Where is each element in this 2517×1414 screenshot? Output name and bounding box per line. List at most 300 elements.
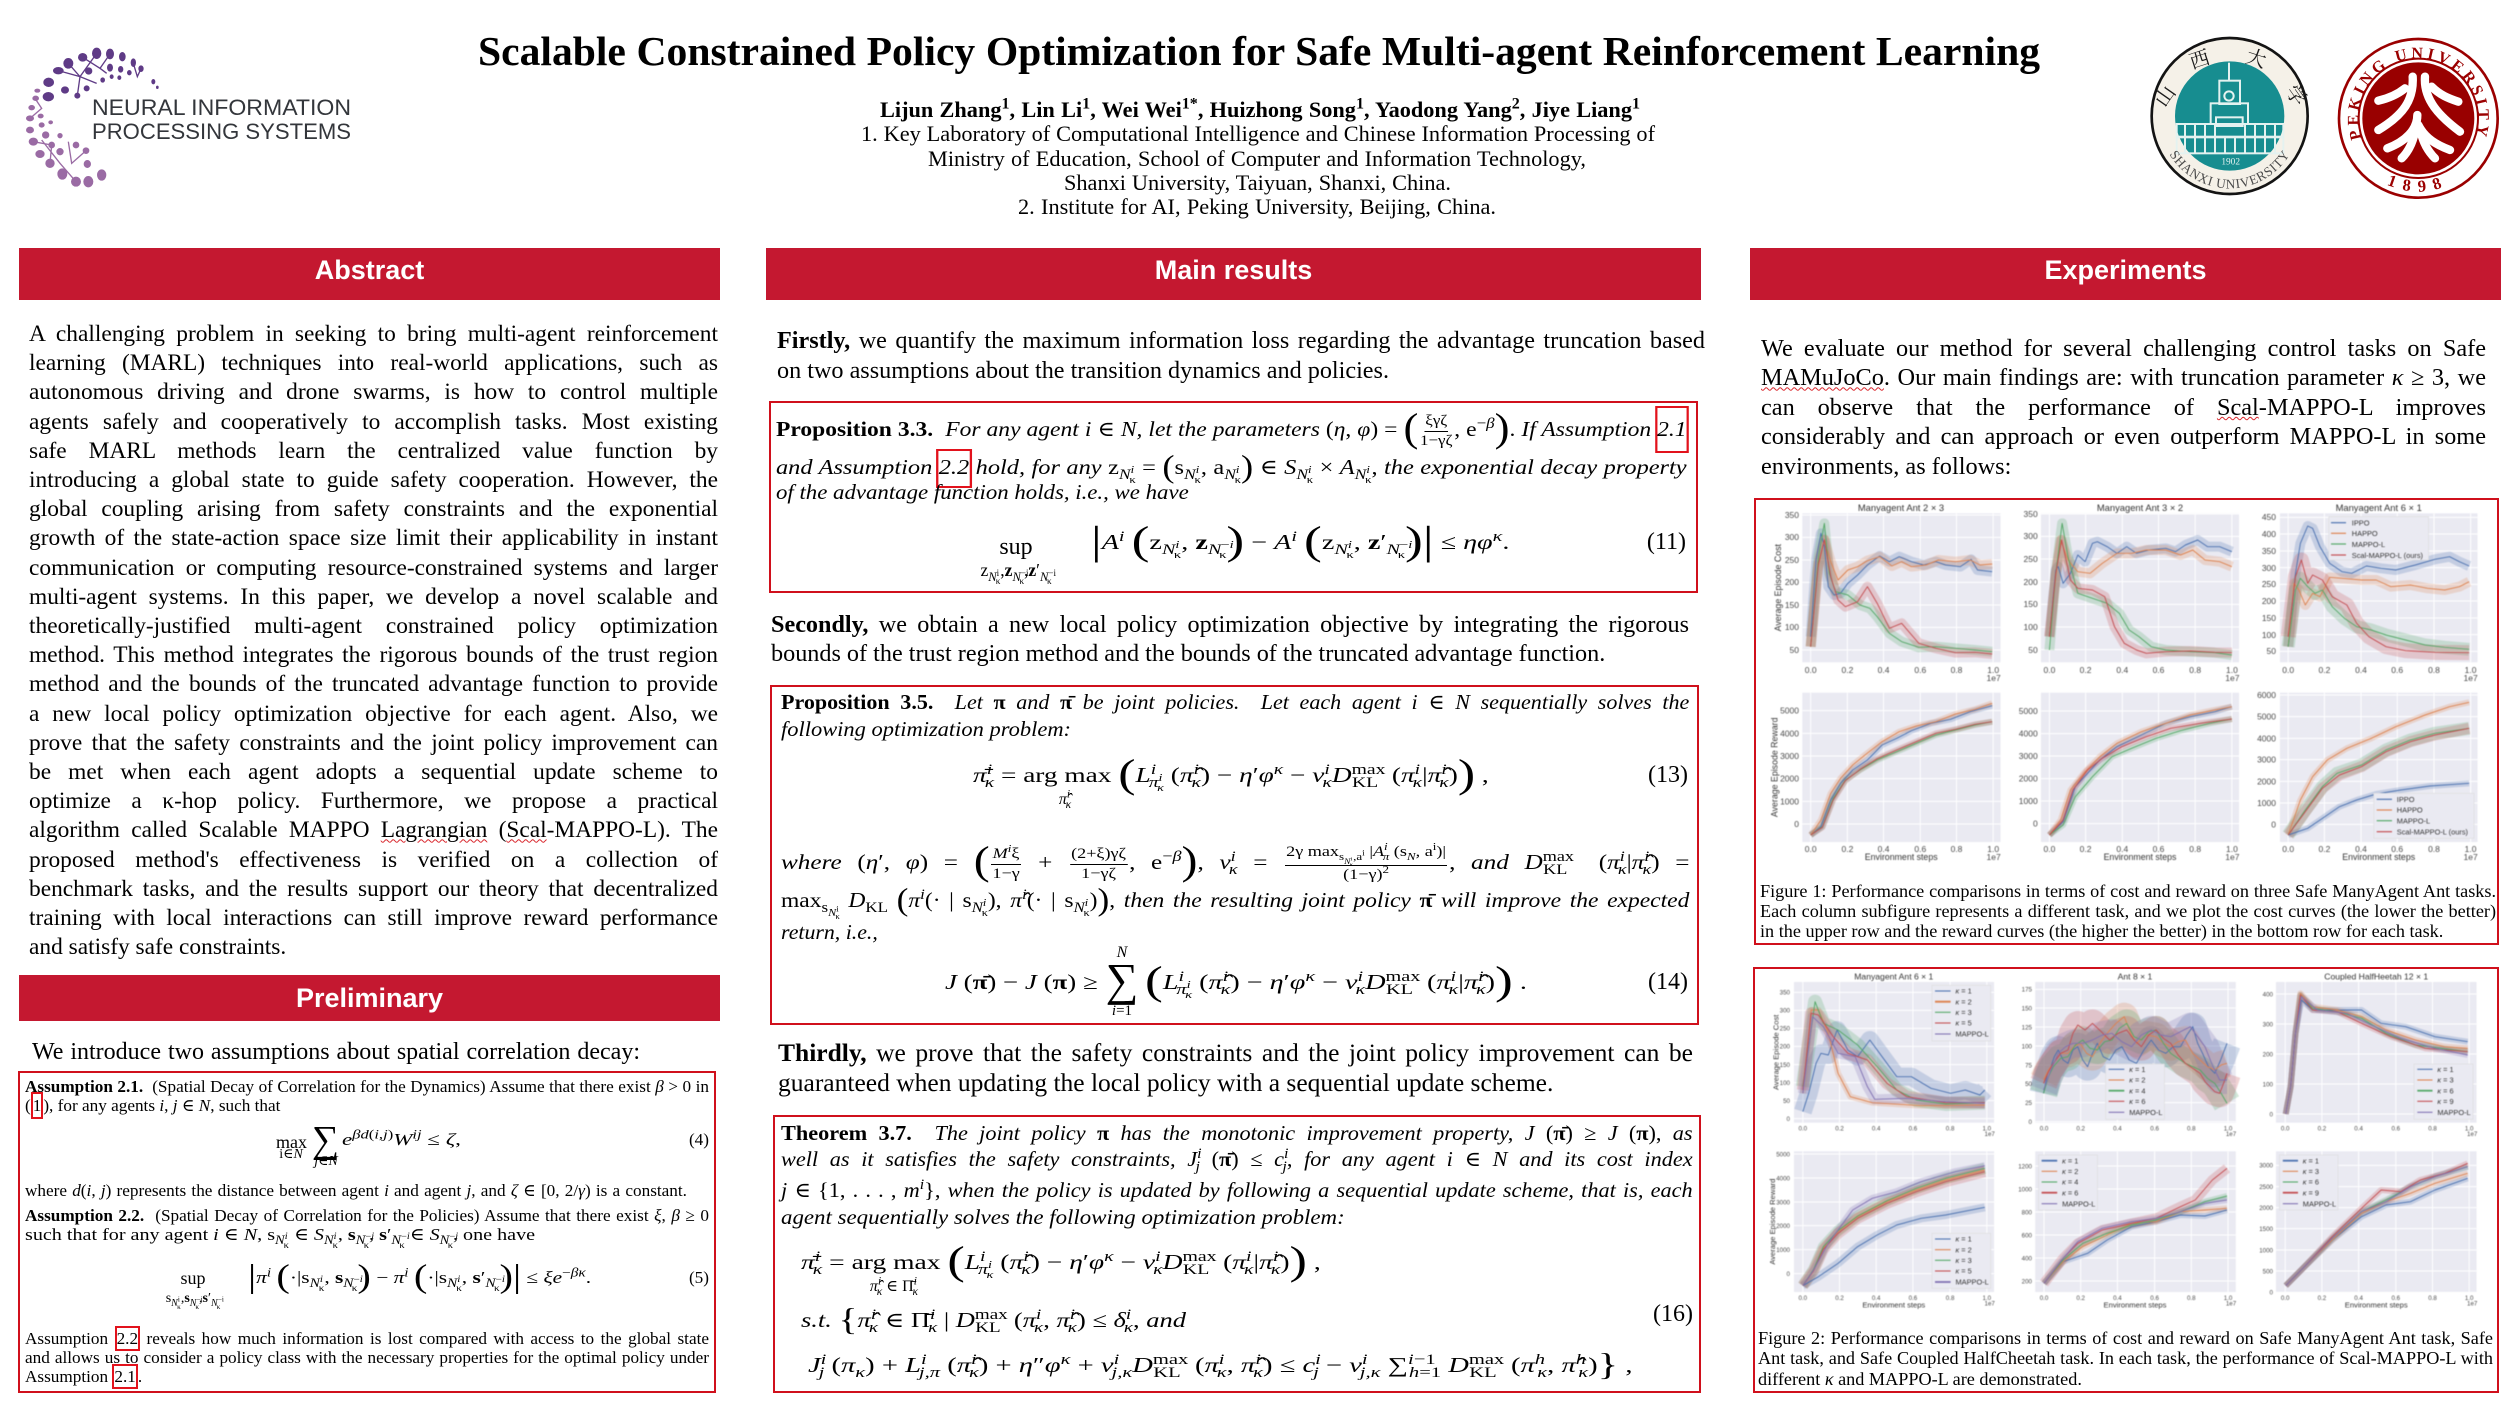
chart: Coupled HalfHeetah 12x1 reward <box>2259 1151 2478 1310</box>
chart: Manyagent Ant 3x2 cost: 300 <box>2024 531 2038 541</box>
text: thirdly: guaranteed when updating the local policy with a sequential update scheme. <box>778 1068 1553 1097</box>
text: abstract body: optimize a κ-hop policy. Furthermore, we propose a practical <box>29 788 718 814</box>
legend: κ = 6 <box>2303 1178 2319 1187</box>
theorem line 4: agent sequentially solves the following optimization problem: <box>781 1205 1345 1229</box>
chart: Manyagent Ant 3x2 reward: 0.6 <box>2153 844 2165 854</box>
text: abstract body: growth of the state-action space size limit their applicability in instant <box>29 525 718 551</box>
under arg max: π̂i κ <box>1059 789 1071 811</box>
text: abstract body <box>29 321 718 960</box>
where line: 1−γ <box>992 866 1020 882</box>
chart: Coupled HalfHeetah 12x1 reward: 1000 <box>2259 1247 2274 1254</box>
equation 16 constraint set: s.t. {π̂iκ ∈ Π̄iκ | DmaxKL (πiκ, π̂iκ) ≤ δiκ, and <box>801 1302 1186 1337</box>
chart: Manyagent Ant 6x1 kappa cost: 250 <box>1780 1026 1791 1033</box>
chart: Manyagent Ant 6x1 kappa cost: 350 <box>1780 990 1791 997</box>
legend: κ = 2 <box>1956 1245 1972 1254</box>
text: abstract body: algorithm called Scalable MAPPO Lagrangian (Scal-MAPPO-L). The <box>29 817 718 843</box>
caption: figure 2 <box>1758 1328 2493 1390</box>
closing remark: Assumption 2.2 reveals how much information is lost compared with access to the global state <box>25 1329 709 1348</box>
logo: Shanxi University seal: SHANXI UNIVERSITY <box>2170 150 2288 188</box>
legend: κ = 4 <box>2129 1086 2145 1095</box>
chart: Manyagent Ant 6x1 reward: 0 <box>2271 819 2276 829</box>
chart: Manyagent Ant 6x1 reward: 1e7 <box>2464 852 2478 862</box>
assumption 2.1 line 2: (1), for any agents i, j ∈ N, such that <box>25 1096 280 1115</box>
text: experiments intro: We evaluate our method for several challenging control tasks on Safe <box>1761 335 2486 362</box>
legend: κ = 1 <box>1956 987 1972 996</box>
legend: Scal-MAPPO-L (ours) <box>2397 828 2468 836</box>
chart: Manyagent Ant 6x1 cost <box>2262 502 2478 683</box>
authors and affiliations <box>861 96 1656 219</box>
text: abstract body: theoretically-justified multi-agent constrained policy optimization <box>29 613 718 639</box>
text: abstract body: safe MARL methods learn the centralized value function by <box>29 438 718 464</box>
closing remark: Assumption 2.1. <box>25 1367 142 1386</box>
legend: κ = 5 <box>1956 1019 1972 1028</box>
equation number 11: (11) <box>1647 529 1686 555</box>
equation 16 under arg max: π̂i κ ∈ Π̄i κ <box>870 1276 918 1298</box>
chart: Manyagent Ant 2x3 reward: 0.2 <box>1841 844 1854 854</box>
chart: Manyagent Ant 2x3 cost: 50 <box>1790 645 1799 655</box>
legend <box>1932 1233 1991 1288</box>
chart: Coupled HalfHeetah 12x1 reward: 3000 <box>2259 1163 2274 1170</box>
chart: Coupled HalfHeetah 12x1 reward: 0 <box>2270 1290 2274 1297</box>
chart: Ant 8x1 reward: 0.8 <box>2187 1295 2196 1302</box>
chart: Coupled HalfHeetah 12x1 reward: 1e7 <box>2467 1300 2478 1308</box>
theorem line 2: well as it satisfies the safety constraints, Jij (π̄) ≤ cij, for any agent i ∈ N and its cost index <box>781 1146 1693 1175</box>
chart: Manyagent Ant 6x1 kappa reward: 0 <box>1787 1271 1791 1278</box>
chart: Manyagent Ant 3x2 reward: 0 <box>2033 819 2038 829</box>
heading: Main results: Main results <box>1155 255 1312 285</box>
legend: κ = 4 <box>2062 1178 2078 1187</box>
chart: Manyagent Ant 3x2 cost: Manyagent Ant 3 × 2 <box>2097 502 2183 513</box>
chart: Manyagent Ant 6x1 reward: 1000 <box>2257 798 2276 808</box>
closing remark <box>25 1326 709 1389</box>
authors: Lijun Zhang1, Lin Li1, Wei Wei1*, Huizhong Song1, Yaodong Yang2, Jiye Liang1 <box>880 96 1640 122</box>
caption: figure 2: Ant task, and Safe Coupled HalfCheetah task. In each task, the performance of Scal-MAPPO-L with <box>1758 1348 2493 1368</box>
chart: Manyagent Ant 6x1 cost: 1e7 <box>2464 673 2478 683</box>
text: secondly <box>771 611 1689 667</box>
chart: Manyagent Ant 2x3 reward: 0.0 <box>1805 844 1817 854</box>
text: abstract body: introducing a global state to guide safety cooperation. However, the <box>29 467 718 493</box>
equation 4 <box>276 1119 709 1169</box>
proposition 3.3 line 3: of the advantage function holds, i.e., we have <box>776 480 1189 504</box>
legend: κ = 6 <box>2437 1086 2454 1095</box>
chart: Manyagent Ant 6x1 kappa cost: 0.6 <box>1909 1126 1918 1132</box>
legend: κ = 3 <box>2303 1167 2319 1176</box>
chart: Coupled HalfHeetah 12x1 cost: 1.0 <box>2465 1126 2474 1132</box>
equation number 14: (14) <box>1648 969 1688 995</box>
chart: Ant 8x1 reward: 400 <box>2022 1255 2033 1262</box>
chart: Ant 8x1 cost: 0.6 <box>2150 1126 2159 1132</box>
chart: Manyagent Ant 6x1 cost: 250 <box>2262 579 2276 589</box>
chart: Manyagent Ant 3x2 cost <box>2024 502 2240 683</box>
equation 5 <box>166 1259 709 1311</box>
heading: Main results <box>766 248 1701 300</box>
chart: Ant 8x1 cost: 75 <box>2025 1062 2033 1069</box>
chart: Coupled HalfHeetah 12x1 reward: 2500 <box>2259 1184 2274 1191</box>
proposition 3.3 line 1: 1−γζ <box>1420 433 1453 449</box>
chart: Coupled HalfHeetah 12x1 reward: 500 <box>2263 1268 2274 1275</box>
logo: Shanxi University seal: 西 <box>2185 41 2213 75</box>
text: abstract body: multi-agent systems. In this paper, we develop a novel scalable and <box>29 584 718 610</box>
text: experiments intro: environments, as follows: <box>1761 453 2011 480</box>
legend <box>2329 517 2428 560</box>
text: abstract body: proposed method's effectiveness is verified on a collection of <box>29 847 718 873</box>
chart: Manyagent Ant 2x3 cost: 100 <box>1785 622 1799 632</box>
chart: Ant 8x1 cost: 0.0 <box>2040 1126 2049 1132</box>
chart: Manyagent Ant 6x1 reward: 2000 <box>2257 776 2276 786</box>
chart: Manyagent Ant 3x2 reward: 5000 <box>2019 706 2038 716</box>
legend: κ = 1 <box>2062 1156 2078 1165</box>
chart: Manyagent Ant 6x1 cost: 200 <box>2262 596 2276 606</box>
chart: Manyagent Ant 3x2 reward: 0.8 <box>2189 844 2201 854</box>
closing remark: and allows us to consider a policy class with the necessary properties for the optimal policy under <box>25 1348 709 1367</box>
legend: κ = 1 <box>1956 1235 1972 1244</box>
chart: Coupled HalfHeetah 12x1 reward: 1.0 <box>2465 1295 2474 1302</box>
chart: Ant 8x1 cost: 25 <box>2025 1100 2033 1107</box>
caption: figure 1 <box>1760 881 2496 941</box>
text: experiments intro: considerably and can approach or even outperform MAPPO-L in some <box>1761 423 2486 450</box>
chart: Manyagent Ant 6x1 reward <box>2257 690 2478 862</box>
legend: κ = 6 <box>2062 1188 2078 1197</box>
legend: κ = 9 <box>2303 1188 2319 1197</box>
chart: Ant 8x1 reward <box>2018 1151 2237 1310</box>
chart: Ant 8x1 cost: 1.0 <box>2224 1126 2233 1132</box>
chart: Manyagent Ant 2x3 cost: 1.0 <box>1987 665 1999 675</box>
chart: Manyagent Ant 6x1 kappa cost: 0 <box>1787 1116 1791 1123</box>
chart: Manyagent Ant 2x3 cost: 0.8 <box>1951 665 1963 675</box>
logo: Shanxi University seal: 1902 <box>2221 158 2240 168</box>
legend <box>2039 1155 2097 1210</box>
equation number 13: (13) <box>1648 762 1688 788</box>
chart: Manyagent Ant 3x2 cost: 0.4 <box>2116 665 2128 675</box>
equation 13: π̄iκ = arg max (Liπi κ (π̂iκ) − η′φκ − νiκDmaxKL (πiκ|π̂iκ)) , <box>973 751 1489 796</box>
proposition 3.5 line 2: following optimization problem: <box>781 717 1071 741</box>
chart: Manyagent Ant 6x1 reward: Environment steps <box>2342 852 2416 862</box>
chart: Coupled HalfHeetah 12x1 reward: 0.0 <box>2281 1295 2290 1302</box>
chart: Manyagent Ant 3x2 cost: 0.6 <box>2153 665 2165 675</box>
chart: Manyagent Ant 2x3 reward: 4000 <box>1780 728 1799 738</box>
chart: Manyagent Ant 6x1 kappa reward: 0.8 <box>1946 1295 1955 1302</box>
chart: Manyagent Ant 2x3 cost: 0.2 <box>1841 665 1854 675</box>
logo: Peking University seal <box>2338 38 2499 199</box>
equation 14: J (π̄) − J (π) ≥ <box>945 970 1098 994</box>
where line: Miξ <box>993 843 1020 862</box>
chart: Ant 8x1 cost: 100 <box>2022 1043 2033 1050</box>
chart: Manyagent Ant 6x1 cost: 100 <box>2262 630 2276 640</box>
chart: Manyagent Ant 3x2 cost: 250 <box>2024 554 2038 564</box>
chart: Manyagent Ant 6x1 kappa reward: Environment steps <box>1862 1300 1925 1310</box>
legend: κ = 2 <box>2062 1167 2078 1176</box>
logo: NeurIPS: PROCESSING SYSTEMS <box>92 119 351 144</box>
legend: κ = 1 <box>2303 1156 2319 1165</box>
chart: Manyagent Ant 2x3 cost: 250 <box>1785 555 1799 565</box>
chart: Manyagent Ant 6x1 kappa reward: 2000 <box>1776 1223 1791 1230</box>
chart: Manyagent Ant 6x1 cost: 50 <box>2267 646 2276 656</box>
assumption 2.2 line 2: such that for any agent i ∈ N, sNi κ ∈ SNi κ, sN−i κ, s′N−i κ ∈ SN−i κ, one have <box>25 1225 535 1250</box>
equation 14 sum top: N <box>1117 944 1127 961</box>
chart: Ant 8x1 cost: 0.2 <box>2076 1126 2086 1132</box>
logo: Shanxi University seal: 大 <box>2243 40 2271 74</box>
chart: Manyagent Ant 2x3 cost: 0.4 <box>1878 665 1890 675</box>
heading: Abstract <box>19 248 720 300</box>
text: firstly: on two assumptions about the transition dynamics and policies. <box>777 357 1389 384</box>
legend: MAPPO-L <box>2397 816 2430 826</box>
chart: Manyagent Ant 6x1 kappa cost: 0.8 <box>1946 1126 1955 1132</box>
text: firstly: Firstly, we quantify the maximum information loss regarding the advantage truncation based <box>777 327 1705 354</box>
chart: Manyagent Ant 6x1 kappa reward: Average Episode Reward <box>1768 1179 1777 1265</box>
chart: Coupled HalfHeetah 12x1 cost: Coupled HalfHeetah 12 × 1 <box>2324 972 2428 982</box>
legend: IPPO <box>2397 795 2415 804</box>
chart: Manyagent Ant 6x1 kappa cost: 0.2 <box>1835 1126 1844 1132</box>
chart: Manyagent Ant 6x1 kappa reward: 3000 <box>1776 1199 1791 1206</box>
legend: κ = 6 <box>2129 1097 2145 1106</box>
theorem line 3: j ∈ {1, . . . , mi}, when the policy is updated by following a sequential update scheme, that is, each <box>781 1177 1693 1202</box>
chart: Manyagent Ant 2x3 cost: 350 <box>1785 510 1799 520</box>
logo: Shanxi University seal <box>2146 36 2315 196</box>
chart: Manyagent Ant 6x1 reward: 0.2 <box>2318 844 2331 854</box>
text: secondly: bounds of the trust region method and the bounds of the truncated advantage function. <box>771 640 1605 667</box>
assumption 2.1 line 1: Assumption 2.1. (Spatial Decay of Correlation for the Dynamics) Assume that there exist β > 0 in <box>25 1077 709 1096</box>
legend: κ = 3 <box>1956 1008 1972 1017</box>
text: abstract body: and satisfy safe constraints. <box>29 934 286 960</box>
panel: figure 1 <box>1754 498 2499 945</box>
equation body: |πi (·|sNi κ, sN−i κ) − πi (·|sNi κ, s′N−i κ)| ≤ ξe−βκ. <box>248 1259 591 1295</box>
chart: Ant 8x1 cost: Ant 8 × 1 <box>2118 972 2153 982</box>
chart: Manyagent Ant 3x2 reward: 4000 <box>2019 729 2038 739</box>
legend: HAPPO <box>2352 529 2378 538</box>
max operator: max <box>276 1132 307 1152</box>
text: secondly: Secondly, we obtain a new local policy optimization objective by integrating the rigorous <box>771 611 1689 638</box>
equation number 5: (5) <box>689 1268 709 1287</box>
chart: Manyagent Ant 2x3 reward: 3000 <box>1780 751 1799 761</box>
legend: κ = 1 <box>2437 1065 2454 1074</box>
panel: abstract and preliminary column <box>18 248 720 1393</box>
chart: Manyagent Ant 3x2 cost: 350 <box>2024 509 2038 519</box>
affiliation line 2: Ministry of Education, School of Computer and Information Technology, <box>928 146 1586 171</box>
proposition 3.3 line 1: ξγζ <box>1425 413 1447 429</box>
text: abstract body: A challenging problem in seeking to bring multi-agent reinforcement <box>29 321 718 347</box>
chart: Manyagent Ant 2x3 reward: 1.0 <box>1987 844 1999 854</box>
chart: Manyagent Ant 3x2 reward: 0.4 <box>2116 844 2128 854</box>
chart: Ant 8x1 reward: 1e7 <box>2226 1300 2237 1308</box>
chart: Coupled HalfHeetah 12x1 cost: 0.8 <box>2428 1126 2437 1132</box>
text: abstract body: learning (MARL) techniques into real-world applications, such as <box>29 350 718 376</box>
chart: Manyagent Ant 3x2 reward: 1000 <box>2019 796 2038 806</box>
legend: κ = 1 <box>2129 1065 2145 1074</box>
chart: Coupled HalfHeetah 12x1 cost: 0.6 <box>2391 1126 2401 1132</box>
chart: Ant 8x1 reward: 0.2 <box>2076 1295 2086 1302</box>
chart: Manyagent Ant 6x1 cost: 150 <box>2262 613 2276 623</box>
chart: Manyagent Ant 6x1 kappa reward: 1e7 <box>1985 1300 1995 1308</box>
chart: Manyagent Ant 2x3 cost: 150 <box>1785 600 1799 610</box>
assumption 2.2 line 1: Assumption 2.2. (Spatial Decay of Correlation for the Policies) Assume that there exist ξ, β ≥ 0 <box>25 1206 709 1225</box>
proposition 3.5 line 1: Proposition 3.5. Let π and π̄ be joint policies. Let each agent i ∈ N sequentially solves the <box>781 690 1689 714</box>
chart: Coupled HalfHeetah 12x1 cost: 0.2 <box>2318 1126 2327 1132</box>
chart: Ant 8x1 cost: 1e7 <box>2226 1131 2237 1138</box>
chart: Coupled HalfHeetah 12x1 reward: 0.2 <box>2318 1295 2327 1302</box>
chart: Manyagent Ant 2x3 cost: Average Episode Cost <box>1773 543 1783 631</box>
caption: figure 2: different κ and MAPPO-L are demonstrated. <box>1758 1369 2082 1389</box>
chart: Manyagent Ant 6x1 kappa reward: 0.2 <box>1835 1295 1844 1302</box>
legend: HAPPO <box>2397 806 2423 815</box>
chart: Coupled HalfHeetah 12x1 reward: 1500 <box>2259 1226 2274 1233</box>
proposition 3.3 line 1: Proposition 3.3. For any agent i ∈ N, let the parameters (η, φ) = ( , e−β). If Assumption 2.1 <box>776 405 1687 450</box>
logo: Peking University seal: PEKING UNIVERSITY <box>2348 48 2489 141</box>
chart: Manyagent Ant 3x2 reward <box>2019 693 2240 862</box>
chart: Manyagent Ant 3x2 reward: 3000 <box>2019 751 2038 761</box>
sup operator: sup <box>180 1268 206 1288</box>
legend: MAPPO-L <box>2352 540 2385 549</box>
affiliation line 3: Shanxi University, Taiyuan, Shanxi, China. <box>1064 170 1451 195</box>
chart: Manyagent Ant 3x2 cost: 1e7 <box>2225 673 2240 683</box>
chart: Manyagent Ant 2x3 reward: 0.4 <box>1878 844 1890 854</box>
chart: Manyagent Ant 3x2 cost: 0.0 <box>2043 665 2056 675</box>
chart: Manyagent Ant 6x1 kappa cost: 0.4 <box>1872 1126 1881 1132</box>
chart: Manyagent Ant 2x3 reward: Average Episode Reward <box>1770 717 1780 817</box>
chart: Manyagent Ant 6x1 cost: 0.2 <box>2318 665 2331 675</box>
text: abstract body: global coupling arising from safety constraints and the exponential <box>29 496 718 522</box>
chart grid: figure 2 <box>1753 967 2499 1322</box>
chart: Manyagent Ant 6x1 kappa cost: 0.0 <box>1798 1126 1808 1132</box>
chart: Coupled HalfHeetah 12x1 reward: 0.4 <box>2354 1295 2363 1302</box>
chart: Manyagent Ant 6x1 kappa cost: 100 <box>1780 1080 1791 1087</box>
chart: Manyagent Ant 6x1 reward: 1.0 <box>2465 844 2477 854</box>
text: abstract body: method. This method integrates the rigorous bounds of the trust region <box>29 642 718 668</box>
panel: experiments column <box>1750 248 2501 1393</box>
chart grid: figure 1 <box>1754 498 2499 876</box>
chart: Manyagent Ant 3x2 reward: 0.0 <box>2043 844 2056 854</box>
chart: Coupled HalfHeetah 12x1 cost: 1e7 <box>2467 1131 2478 1138</box>
legend: κ = 9 <box>2437 1097 2454 1106</box>
chart: Manyagent Ant 6x1 reward: 6000 <box>2257 690 2276 700</box>
text: abstract body: training with local interactions can still improve reward performance <box>29 905 718 931</box>
chart: Manyagent Ant 6x1 cost: 1.0 <box>2465 665 2477 675</box>
logo: Peking University seal: 1898 <box>2388 176 2442 192</box>
legend: IPPO <box>2352 518 2370 528</box>
text: abstract body: prove that the safety constraints and the joint policy improvement can <box>29 730 718 756</box>
chart: Manyagent Ant 6x1 cost: 350 <box>2262 546 2276 556</box>
title: Scalable Constrained Policy Optimization for Safe Multi-agent Reinforcement Learning <box>478 28 2040 74</box>
equation number 4: (4) <box>689 1130 709 1149</box>
chart: Ant 8x1 reward: 0.4 <box>2113 1295 2122 1302</box>
equation 16 cost constraint: Jij (πκ) + Lij,π (π̂iκ) + η″φκ + νij,κDmaxKL (πiκ, π̂iκ) ≤ cij − νij,κ ∑i−1h=1 DmaxKL (πhκ, π̂hκ)} , <box>808 1347 1632 1382</box>
text: thirdly <box>778 1038 1693 1098</box>
chart: Manyagent Ant 6x1 kappa cost: 150 <box>1780 1062 1791 1069</box>
chart: Manyagent Ant 3x2 cost: 200 <box>2024 577 2038 587</box>
chart: Manyagent Ant 2x3 cost: 0.6 <box>1914 665 1926 675</box>
chart: Coupled HalfHeetah 12x1 reward: 2000 <box>2259 1205 2274 1212</box>
chart: Manyagent Ant 3x2 cost: 50 <box>2028 645 2038 655</box>
chart: Ant 8x1 cost: 0.4 <box>2113 1126 2122 1132</box>
chart: Manyagent Ant 3x2 cost: 150 <box>2024 599 2038 609</box>
chart: Ant 8x1 cost: 150 <box>2022 1005 2033 1012</box>
chart: Manyagent Ant 6x1 cost: 400 <box>2262 529 2276 539</box>
chart: Manyagent Ant 6x1 kappa cost <box>1772 972 1995 1138</box>
where line: 2γ maxsNi κ,ai |Ai π (sN, ai)| <box>1286 841 1446 868</box>
text: experiments intro: MAMuJoCo. Our main findings are: with truncation parameter κ ≥ 3, we <box>1761 364 2486 391</box>
panel: assumptions box <box>18 1071 716 1393</box>
sum symbol: ∑ <box>312 1119 339 1161</box>
chart: Ant 8x1 reward: 800 <box>2022 1209 2033 1216</box>
chart: Manyagent Ant 6x1 kappa reward: 1000 <box>1776 1247 1791 1254</box>
caption: figure 2: Figure 2: Performance comparisons in terms of cost and reward on Safe ManyAgent Ant task, Safe <box>1758 1328 2493 1348</box>
legend: κ = 2 <box>2129 1076 2145 1085</box>
chart: Coupled HalfHeetah 12x1 cost: 100 <box>2263 1081 2274 1088</box>
logo: NeurIPS: NEURAL INFORMATION <box>92 95 351 120</box>
chart: Manyagent Ant 6x1 reward: 4000 <box>2257 733 2276 743</box>
chart: Ant 8x1 reward: 200 <box>2022 1278 2033 1285</box>
equation number 16: (16) <box>1653 1301 1693 1327</box>
chart: Manyagent Ant 3x2 reward: 1.0 <box>2226 844 2238 854</box>
chart: Manyagent Ant 6x1 kappa cost: 300 <box>1780 1008 1791 1015</box>
chart: Manyagent Ant 6x1 reward: 0.4 <box>2355 844 2367 854</box>
chart: Manyagent Ant 6x1 cost: 450 <box>2262 512 2276 522</box>
chart: Manyagent Ant 6x1 kappa reward: 0.0 <box>1798 1295 1808 1302</box>
chart: Manyagent Ant 6x1 cost: Manyagent Ant 6 × 1 <box>2336 502 2422 513</box>
chart: Manyagent Ant 6x1 kappa reward: 4000 <box>1776 1175 1791 1182</box>
chart: Manyagent Ant 2x3 reward: 5000 <box>1780 706 1799 716</box>
chart: Ant 8x1 cost <box>2022 972 2237 1138</box>
affiliation line 4: 2. Institute for AI, Peking University, Beijing, China. <box>1018 194 1496 219</box>
text: abstract body: agents safely and cooperatively to accomplish tasks. Most existing <box>29 409 718 435</box>
text: preliminary intro: We introduce two assumptions about spatial correlation decay: <box>32 1039 640 1065</box>
chart: Coupled HalfHeetah 12x1 reward: Environment steps <box>2345 1300 2408 1310</box>
chart: Coupled HalfHeetah 12x1 cost <box>2263 972 2478 1138</box>
chart: Manyagent Ant 6x1 reward: 0.8 <box>2428 844 2440 854</box>
text: firstly <box>777 327 1705 384</box>
legend: MAPPO-L <box>1956 1030 1989 1039</box>
where line: (1−γ)2 <box>1343 864 1389 883</box>
equation 11 sup: sup <box>999 534 1033 560</box>
chart: Ant 8x1 reward: Environment steps <box>2104 1300 2167 1310</box>
panel: proposition 3.3 <box>769 401 1698 593</box>
max line: maxsNi κ DKL (πi(· | sNi κ), π̂i(· | sNi κ)), then the resulting joint policy π̄ will improve the expected <box>781 882 1689 921</box>
under sum: j∈N <box>314 1154 338 1169</box>
chart: Manyagent Ant 6x1 reward: 3000 <box>2257 755 2276 765</box>
chart: Manyagent Ant 6x1 kappa cost: Manyagent Ant 6 × 1 <box>1854 972 1934 982</box>
legend <box>2106 1064 2164 1119</box>
text: abstract body: method and the bounds of the truncated advantage function to provide <box>29 671 718 697</box>
chart: Manyagent Ant 6x1 kappa cost: 50 <box>1783 1098 1791 1105</box>
chart: Manyagent Ant 6x1 reward: 0.0 <box>2282 844 2294 854</box>
chart: Manyagent Ant 2x3 cost: 300 <box>1785 532 1799 542</box>
chart: Manyagent Ant 6x1 kappa reward: 1.0 <box>1982 1295 1992 1302</box>
chart: Ant 8x1 reward: 1200 <box>2018 1163 2033 1170</box>
chart: Ant 8x1 cost: 50 <box>2025 1081 2033 1088</box>
legend <box>2414 1064 2473 1119</box>
chart: Manyagent Ant 6x1 cost: 0.0 <box>2282 665 2294 675</box>
chart: Manyagent Ant 6x1 cost: 0.6 <box>2391 665 2403 675</box>
chart: Manyagent Ant 6x1 cost: 300 <box>2262 563 2276 573</box>
chart: Coupled HalfHeetah 12x1 cost: 0.4 <box>2354 1126 2363 1132</box>
legend: MAPPO-L <box>2303 1199 2336 1208</box>
text: abstract body: benchmark tasks, and the results support our theory that decentralized <box>29 876 718 902</box>
chart: Manyagent Ant 3x2 cost: 100 <box>2024 622 2038 632</box>
where line: where d(i, j) represents the distance between agent i and agent j, and ζ ∈ [0, 2/γ) is a constant. <box>25 1181 687 1200</box>
chart: Manyagent Ant 2x3 cost: 200 <box>1785 577 1799 587</box>
logos: universities <box>2146 36 2499 199</box>
legend: κ = 5 <box>1956 1267 1972 1276</box>
chart: Manyagent Ant 2x3 reward: Environment steps <box>1865 852 1938 862</box>
equation 14 sum: ∑ <box>1106 954 1138 1005</box>
legend: MAPPO-L <box>2062 1199 2095 1208</box>
chart: Coupled HalfHeetah 12x1 reward: 0.6 <box>2391 1295 2401 1302</box>
panel: proposition 3.5 <box>770 685 1699 1025</box>
chart: Coupled HalfHeetah 12x1 cost: 200 <box>2263 1051 2274 1058</box>
chart: Ant 8x1 reward: 1.0 <box>2224 1295 2233 1302</box>
chart: Manyagent Ant 3x2 cost: 1.0 <box>2226 665 2238 675</box>
chart: Manyagent Ant 6x1 reward: 5000 <box>2257 712 2276 722</box>
chart: Manyagent Ant 3x2 reward: 0.2 <box>2080 844 2092 854</box>
